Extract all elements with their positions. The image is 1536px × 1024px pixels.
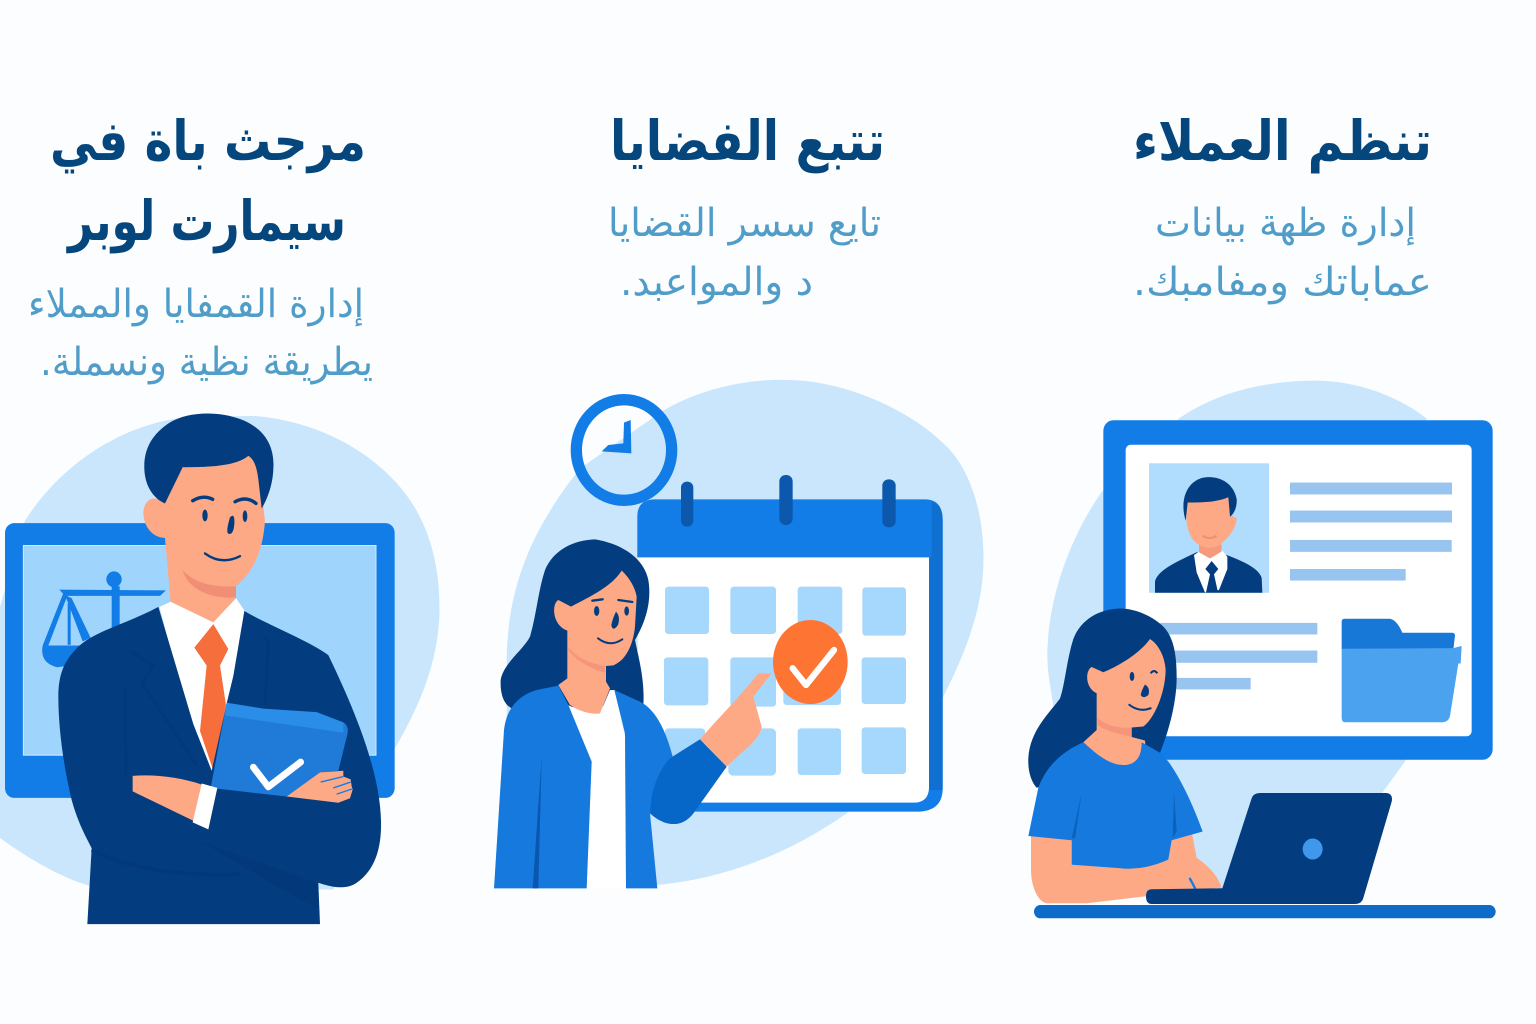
text: case tracking description line 2: د والمواعبد. [620, 260, 813, 305]
jacket shadow [92, 638, 318, 909]
woman: jacket [494, 686, 727, 888]
icon: clock [576, 400, 672, 500]
shirt [159, 598, 245, 776]
illustration: calendar and woman [494, 380, 983, 888]
icon: check mark [253, 762, 301, 787]
face details [193, 497, 256, 560]
hand [287, 771, 353, 803]
panel: client organisation [1028, 109, 1496, 918]
woman: face and neck [1083, 639, 1166, 768]
icon: folder [1342, 619, 1462, 722]
woman: arm [1031, 832, 1222, 903]
neck and face [163, 456, 265, 624]
heading: welcome line 2: سيمارت لوبر [66, 189, 346, 254]
text: case tracking description line 1: تايع سسر القضايا [608, 201, 881, 246]
background blob [507, 380, 983, 885]
monitor [1103, 420, 1493, 760]
laptop [1146, 793, 1392, 904]
panel: welcome [0, 109, 439, 924]
client photo [1149, 463, 1269, 593]
tie [194, 624, 228, 771]
woman: face details [1097, 671, 1157, 737]
desk [1034, 905, 1496, 918]
icon: scales of justice [42, 571, 166, 667]
panel: case tracking [494, 109, 983, 888]
woman: face details [568, 599, 632, 673]
illustration: client records [1028, 381, 1496, 918]
illustration: lawyer [0, 413, 439, 924]
calendar rings [681, 475, 896, 527]
woman: hair [501, 539, 649, 708]
text lines upper [1290, 483, 1452, 581]
woman: hair [1028, 609, 1177, 788]
background blob [0, 416, 439, 890]
text lines lower [1160, 623, 1317, 689]
calendar cells [664, 587, 906, 776]
text: client description line 2: عماباتك ومفامبك. [1133, 260, 1432, 305]
background blob [1047, 381, 1453, 891]
text: welcome description line 1: إدارة القمفايا والمملاء [28, 282, 364, 327]
woman: shirt [1028, 742, 1203, 869]
icon: orange check badge [773, 620, 848, 704]
heading: welcome line 1: مرجث باة في [50, 109, 366, 174]
chin shadow [182, 569, 236, 598]
calendar [637, 475, 943, 812]
text: client description line 1: إدارة ظهة بيانات [1155, 201, 1416, 246]
woman: white top [568, 690, 626, 888]
hair [144, 413, 273, 509]
woman: pointing hand [700, 673, 772, 767]
text: welcome description line 2: يطريقة نظية ونسملة. [40, 340, 373, 385]
suit jacket [58, 607, 381, 924]
pen [1190, 879, 1195, 888]
forearm [133, 775, 202, 821]
ear [143, 498, 165, 538]
monitor [5, 523, 395, 798]
heading: case tracking: تتبع الفضايا [610, 109, 885, 173]
shirt cuff [193, 783, 217, 829]
woman: face and neck [554, 571, 637, 714]
heading: client organisation: تنظم العملاء [1133, 109, 1432, 174]
folder [211, 703, 348, 797]
